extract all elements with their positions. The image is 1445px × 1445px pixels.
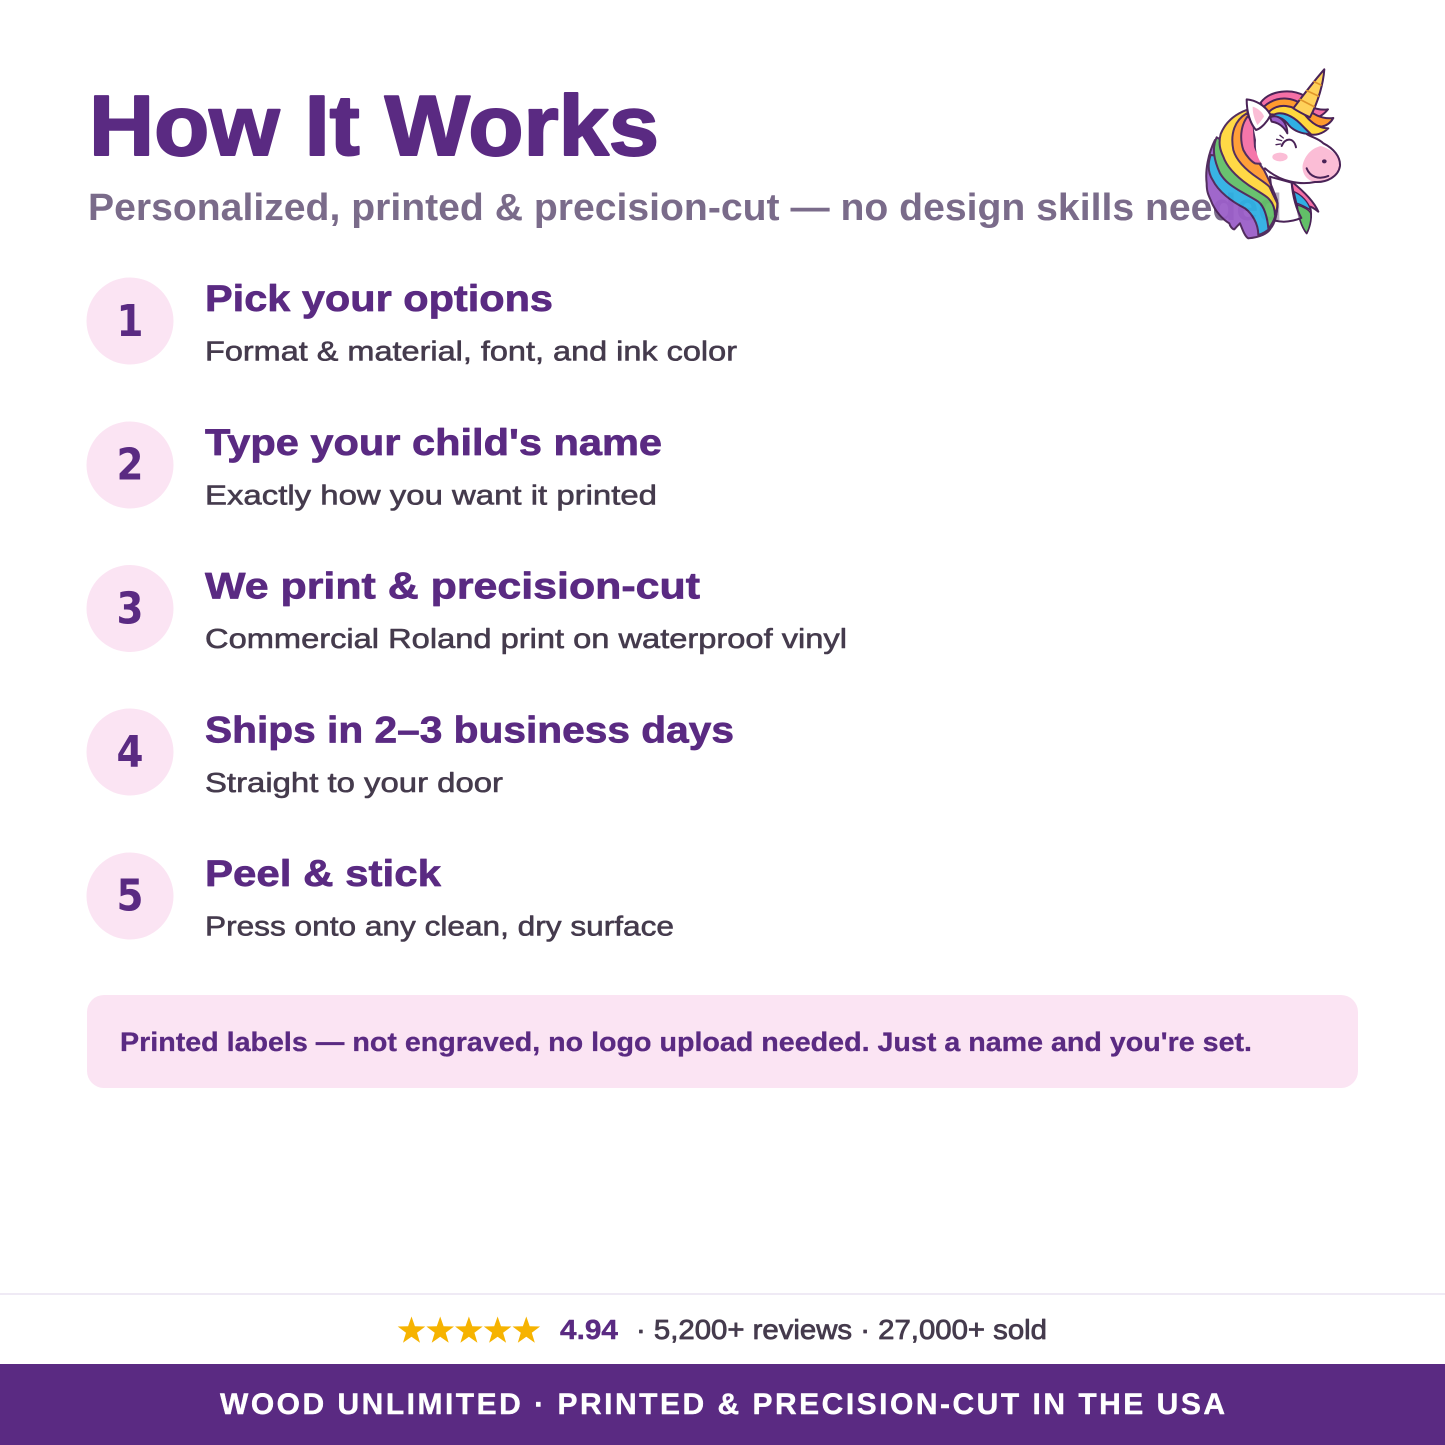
forelock: orange — [1264, 99, 1333, 127]
step 1 number badge: 1 — [116, 296, 144, 347]
eye — [1282, 140, 1296, 147]
forelock: blue — [1273, 113, 1311, 134]
step 2 heading: Type your child's name — [205, 422, 662, 463]
horn — [1293, 69, 1324, 117]
step 1 heading: Pick your options — [205, 278, 553, 319]
step 2 number badge — [86, 422, 174, 508]
mane band: green — [1214, 137, 1277, 228]
step 3 number badge — [86, 565, 174, 652]
step 3 number badge: 3 — [116, 583, 144, 634]
step 4 heading: Ships in 2–3 business days — [205, 710, 734, 750]
mane band: yellow — [1220, 110, 1277, 215]
right mane behind neck — [1292, 182, 1318, 233]
smile — [1307, 168, 1328, 178]
step 2 — [86, 422, 662, 510]
rating value: 4.94 — [560, 1314, 618, 1345]
step 2 description: Exactly how you want it printed — [205, 480, 657, 510]
title: How It Works — [89, 79, 659, 174]
review and sales counts: · 5,200+ reviews · 27,000+ sold — [636, 1314, 1047, 1345]
step 3 description: Commercial Roland print on waterproof vinyl — [205, 623, 847, 654]
step 4 number badge: 4 — [116, 727, 144, 778]
subtitle: Personalized, printed & precision-cut — no design skills needed — [88, 187, 1282, 229]
mane band: pink — [1241, 117, 1267, 164]
step 5 description: Press onto any clean, dry surface — [205, 910, 674, 942]
forelock: purple — [1270, 116, 1287, 133]
ear — [1247, 99, 1271, 130]
mane band: orange — [1232, 113, 1277, 203]
step 5 number badge — [86, 852, 174, 940]
step 5 — [86, 852, 674, 942]
muzzle — [1303, 146, 1340, 182]
mane band: blue — [1209, 155, 1277, 235]
step 1 description: Format & material, font, and ink color — [205, 336, 737, 366]
step 5 heading: Peel & stick — [205, 853, 441, 894]
step 5 number badge: 5 — [116, 871, 144, 922]
callout — [87, 995, 1358, 1088]
footer band — [0, 1364, 1445, 1445]
mane band: purple — [1206, 140, 1277, 238]
step 1 — [86, 278, 737, 366]
flowing mane — [1206, 110, 1277, 238]
face — [1252, 115, 1340, 183]
footer band: WOOD UNLIMITED · PRINTED & PRECISION-CUT IN THE USA — [220, 1388, 1225, 1421]
step 1 number badge — [86, 278, 174, 364]
nostril — [1322, 159, 1327, 163]
icon: five stars — [398, 1316, 540, 1343]
step 4 number badge — [86, 708, 174, 796]
neck — [1270, 177, 1301, 222]
step 4 — [86, 708, 734, 798]
cheek — [1272, 153, 1288, 161]
step 4 description: Straight to your door — [205, 767, 503, 798]
forelock: pink top — [1261, 91, 1328, 117]
rating row — [398, 1314, 1047, 1345]
forelock: yellow — [1267, 106, 1328, 135]
step 3 heading: We print & precision-cut — [205, 566, 700, 606]
step 3 — [86, 565, 847, 654]
callout: Printed labels — not engraved, no logo upload needed. Just a name and you're set. — [120, 1027, 1252, 1057]
step 2 number badge: 2 — [116, 440, 144, 491]
icon: unicorn — [1206, 69, 1340, 238]
